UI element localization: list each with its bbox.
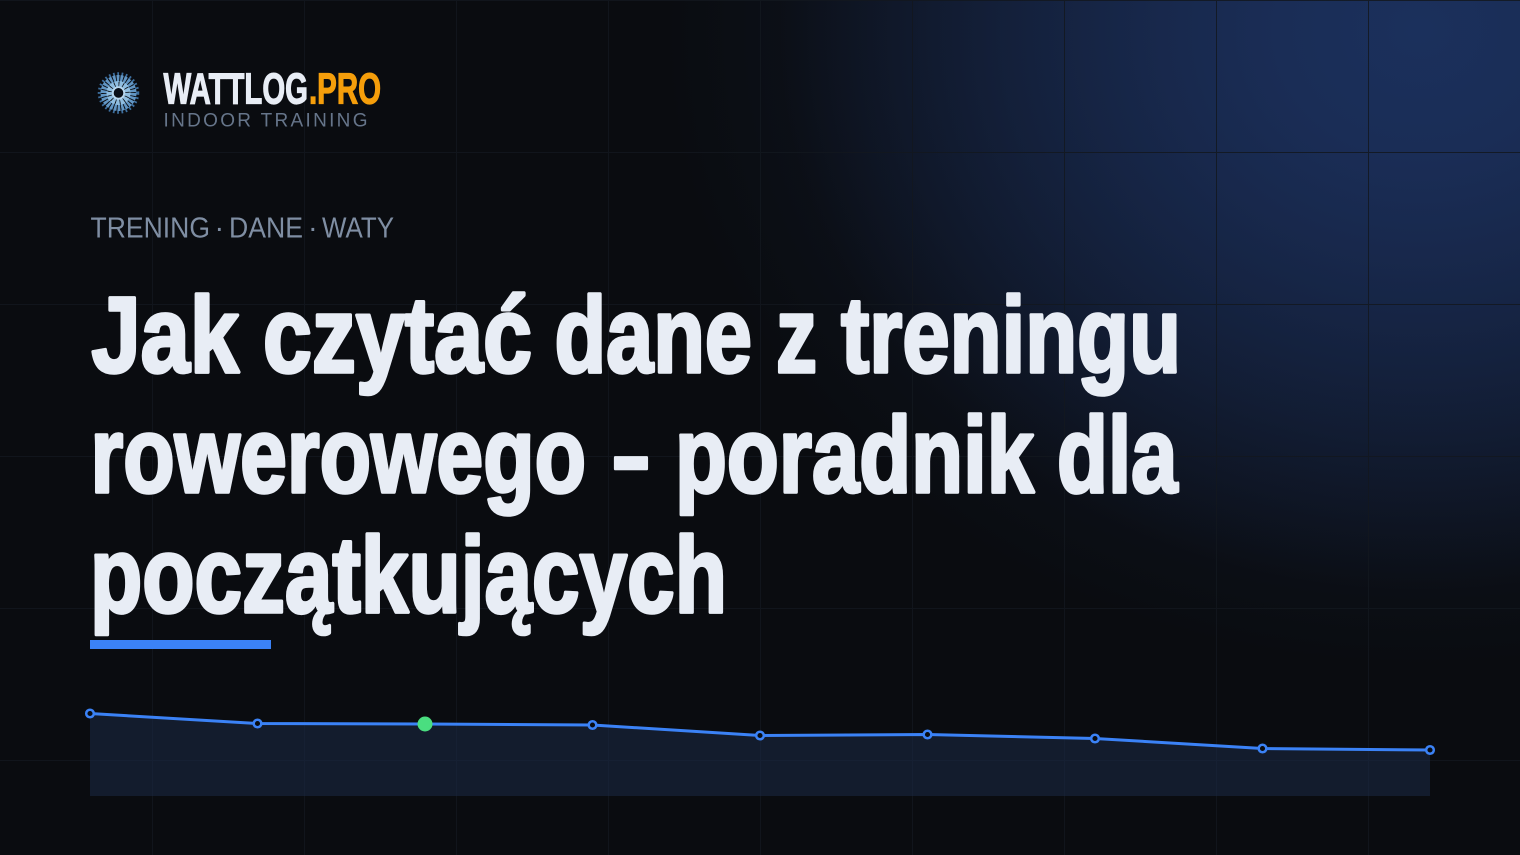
eyebrow label: DANE [229, 212, 303, 244]
eyebrow label: · [214, 212, 224, 244]
title: początkujących [90, 514, 727, 635]
area line chart [86, 710, 1434, 796]
title: Jak [92, 274, 240, 395]
title: dane [554, 274, 752, 395]
title underline accent [90, 640, 271, 649]
title: z [776, 274, 817, 395]
title: czytać [263, 274, 532, 395]
logo tagline: INDOOR TRAINING [164, 110, 368, 132]
logo wordmark: .PRO [309, 64, 381, 114]
eyebrow label: WATY [322, 212, 394, 244]
eyebrow label: · [308, 212, 318, 244]
logo wordmark: WATTLOG [164, 64, 308, 114]
title: poradnik [675, 394, 1035, 515]
eyebrow label [90, 212, 394, 244]
eyebrow label: TRENING [90, 212, 210, 244]
title: – [613, 394, 649, 515]
icon: cassette sprocket logo [100, 74, 138, 112]
title: treningu [841, 274, 1181, 395]
title: rowerowego [90, 394, 586, 515]
title [90, 274, 1181, 635]
title: dla [1057, 394, 1178, 515]
